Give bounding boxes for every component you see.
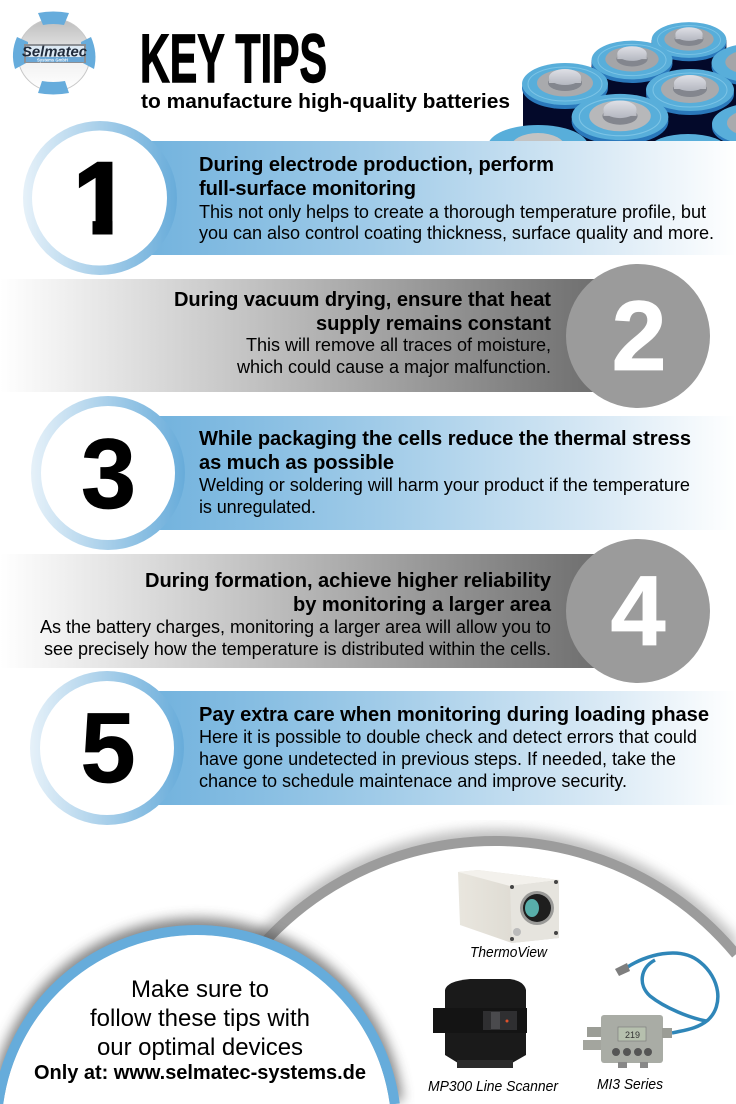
text: tip 1 (199, 154, 714, 243)
title: KEY TIPS (140, 20, 327, 97)
title: to manufacture high-quality batteries (141, 91, 510, 113)
text: call to action: Make sure to (131, 976, 269, 1003)
text: tip 4 (40, 570, 552, 659)
text: tip 1: full-surface monitoring (199, 178, 416, 200)
panel: tip 4 (0, 539, 710, 683)
text: tip 2: This will remove all traces of moisture, (246, 335, 551, 355)
text: tip 1: you can also control coating thickness, surface quality and more. (199, 223, 714, 243)
band: tip 2 (0, 279, 600, 392)
text: tip 5 (199, 704, 709, 791)
band: tip 1 (130, 141, 736, 255)
panel: tip 5 (30, 671, 736, 825)
number badge 5: 5 (80, 692, 136, 803)
text: call to action (34, 976, 366, 1084)
text: tip 3: Welding or soldering will harm your product if the temperature (199, 475, 690, 495)
logo: Systems GmbH (37, 58, 68, 62)
text: tip 2: During vacuum drying, ensure that heat (174, 289, 551, 311)
text: tip 2: supply remains constant (316, 313, 551, 335)
number badge 1 (23, 121, 177, 275)
panel: tip 2 (0, 264, 710, 408)
panel: tip 1 (23, 121, 736, 275)
logo: Selmatec (22, 44, 87, 60)
panel: call to action (0, 918, 403, 1104)
text: tip 3: is unregulated. (199, 497, 316, 517)
band: tip 4 (0, 554, 600, 668)
text: tip 1: During electrode production, perform (199, 154, 554, 176)
logo (13, 12, 95, 94)
number badge 2: 2 (611, 280, 667, 391)
text: call to action: follow these tips with (90, 1005, 310, 1032)
number badge 4: 4 (610, 555, 666, 666)
text: tip 5: Pay extra care when monitoring during loading phase (199, 704, 709, 726)
text: tip 4: During formation, achieve higher reliability (145, 570, 552, 592)
panel: devices arc (255, 822, 736, 958)
band: tip 3 (140, 416, 736, 530)
text: tip 3 (199, 428, 691, 517)
text: call to action: Only at: www.selmatec-systems.de (34, 1062, 366, 1084)
number badge 5 (30, 671, 184, 825)
text: tip 4: As the battery charges, monitoring a larger area will allow you to (40, 617, 551, 637)
text: tip 5: have gone undetected in previous steps. If needed, take the (199, 749, 676, 769)
text: call to action: our optimal devices (97, 1034, 303, 1061)
panel: tip 3 (31, 396, 736, 550)
band: tip 5 (140, 691, 736, 805)
text: tip 3: While packaging the cells reduce the thermal stress (199, 428, 691, 450)
battery photo (490, 22, 736, 141)
label: MP300 Line Scanner: MP300 Line Scanner (428, 1079, 559, 1095)
text: tip 3: as much as possible (199, 452, 394, 474)
icon: ThermoView camera (458, 870, 559, 943)
text: tip 2 (174, 289, 551, 377)
text: tip 1: This not only helps to create a thorough temperature profile, but (199, 202, 706, 222)
text: tip 4: see precisely how the temperature is distributed within the cells. (44, 639, 551, 659)
number badge 3: 3 (81, 418, 136, 529)
text: tip 2: which could cause a major malfunction. (236, 357, 551, 377)
icon: MP300 line scanner (433, 979, 527, 1068)
text: tip 4: by monitoring a larger area (293, 594, 552, 616)
number badge 3 (31, 396, 185, 550)
number badge 2 (566, 264, 710, 408)
text: tip 5: Here it is possible to double check and detect errors that could (199, 727, 697, 747)
text: tip 5: chance to schedule maintenace and improve security. (199, 771, 627, 791)
label: ThermoView: ThermoView (470, 945, 548, 961)
label: MI3 Series: MI3 Series (597, 1077, 663, 1093)
number badge 1: 1 (74, 143, 130, 255)
number badge 4 (566, 539, 710, 683)
icon: MI3 series device: 219 (625, 1030, 640, 1040)
icon: MI3 series device (583, 953, 718, 1068)
